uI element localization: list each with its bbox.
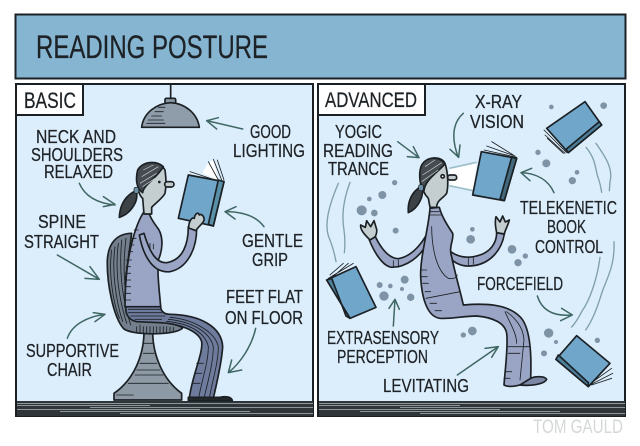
nose [165,182,174,187]
arrow: spine straight [57,255,99,279]
arrow: gentle grip [225,207,264,227]
floating book: top right [544,102,602,153]
label: spine straight: SPINE [38,212,86,232]
floating book: left [327,263,376,318]
label: yogic reading trance: READING [323,141,393,161]
chair [107,233,182,400]
arrow: x-ray vision [450,113,463,157]
label: spine straight [24,212,99,252]
forcefield wavy lines [327,143,614,330]
panel label: advanced: ADVANCED [325,89,417,112]
label: telekenetic book control: CONTROL [535,237,603,257]
label: gentle grip: GRIP [252,250,288,270]
label: neck and shoulders relaxed: NECK AND [36,127,116,147]
label: extrasensory perception: EXTRASENSORY [327,328,439,348]
label: telekenetic book control: TELEKENETIC [520,198,617,218]
title: READING POSTURE [36,29,268,65]
panel label: advanced [318,84,425,115]
figure: levitating reader [361,158,547,386]
x-ray beam [449,163,477,190]
label: neck and shoulders relaxed: RELAXED [44,162,113,182]
label: spine straight: STRAIGHT [24,232,99,252]
label: feet flat on floor: ON FLOOR [225,308,303,328]
arrow: levitating [457,347,498,375]
arrow: feet flat [228,328,256,373]
label: gentle grip [242,231,303,270]
nose [448,175,457,180]
label: feet flat on floor [225,287,303,328]
label: good lighting: LIGHTING [233,141,305,161]
book [202,159,218,180]
icon: ceiling lamp [142,84,199,127]
label: telekenetic book control [520,198,617,257]
hands [361,221,377,240]
label: x-ray vision: X-RAY [475,92,522,112]
label: feet flat on floor: FEET FLAT [226,287,303,307]
label: supportive chair [26,341,119,380]
panel: basic [16,84,313,416]
arrow: forcefield [537,296,572,321]
label: yogic reading trance [323,122,393,179]
body suit [421,207,531,386]
label: extrasensory perception [327,328,439,367]
hair tie [419,185,423,191]
label: telekenetic book control: BOOK [547,217,586,237]
label: x-ray vision: VISION [470,112,524,132]
label: yogic reading trance: YOGIC [335,122,382,142]
hair tie [134,187,139,193]
label: good lighting: GOOD [250,122,291,142]
label: good lighting [233,122,305,161]
arrow: telekenetic [521,168,554,193]
arrow: neck and shoulders [79,183,115,207]
label: supportive chair: CHAIR [47,360,92,380]
head [421,158,448,207]
label: gentle grip: GENTLE [242,231,303,251]
arrow: extrasensory [389,299,399,326]
label: neck and shoulders relaxed: SHOULDERS [31,145,123,165]
label: x-ray vision [470,92,524,132]
arrow: good lighting [207,118,243,129]
panel: advanced [318,84,625,416]
floating book: centre [473,142,517,201]
arrow: yogic trance [398,142,419,158]
arms [369,233,427,267]
hair [420,158,445,191]
floating book: bottom right [556,336,613,387]
legs [126,306,223,398]
floor [319,401,625,416]
label: yogic reading trance: TRANCE [328,159,389,179]
floor [17,401,313,416]
label: supportive chair: SUPPORTIVE [26,341,119,361]
label: neck and shoulders relaxed [31,127,123,182]
panel label: basic: BASIC [24,88,76,113]
hand [189,213,204,231]
label: forcefield: FORCEFIELD [477,274,563,294]
forcefield particles [357,102,607,356]
arrow: supportive chair [67,313,105,338]
arm [139,227,197,272]
head [138,164,166,214]
label: levitating: LEVITATING [383,376,469,396]
torso [125,212,162,307]
hair [137,163,163,193]
shoes [188,397,232,401]
figure: seated reader [119,159,232,401]
title banner [16,14,626,78]
label: extrasensory perception: PERCEPTION [337,347,428,367]
panel label: basic [16,84,83,115]
